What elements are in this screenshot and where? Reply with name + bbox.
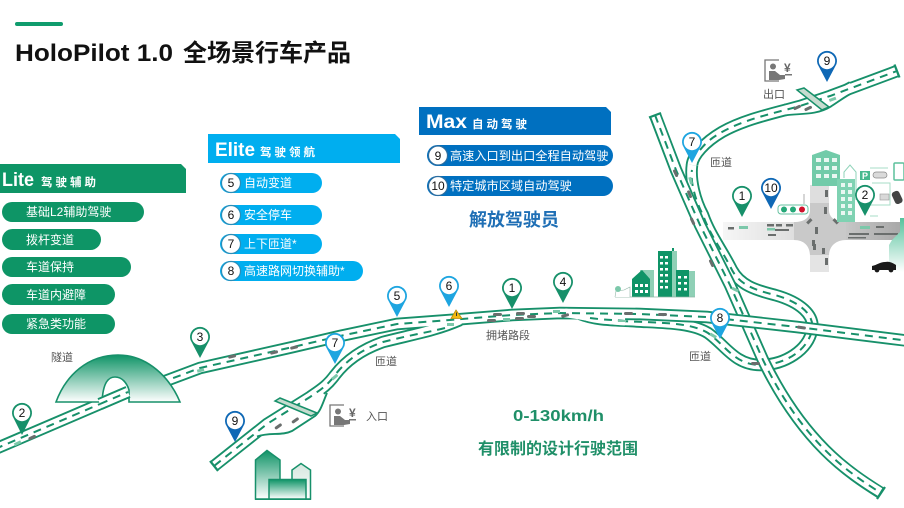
toll gate: entrance <box>275 398 317 416</box>
Max feature 10 <box>427 176 613 196</box>
pin 10 blue city: 10 <box>764 181 778 195</box>
Max slogan: 解放驾驶员 <box>469 210 559 230</box>
warning sign <box>451 310 462 318</box>
label: exit: 出口 <box>763 87 785 101</box>
Elite feature 6: 6 <box>228 208 235 222</box>
toll gate: exit <box>797 88 829 110</box>
city: mid skyline <box>615 248 695 297</box>
Max feature 9 <box>427 145 613 166</box>
toll icon: exit: ¥ <box>784 61 791 75</box>
pin 9 blue lower <box>225 411 245 442</box>
Lite header: 驾驶辅助 <box>41 175 99 189</box>
panel: Lite <box>0 164 186 334</box>
Elite feature 8: 高速路网切换辅助* <box>244 263 345 278</box>
Max feature 10: 特定城市区域自动驾驶 <box>450 178 572 193</box>
Max feature 9: 9 <box>435 149 442 163</box>
panel: Max <box>419 107 613 230</box>
traffic light <box>778 194 808 214</box>
label: ramp top: 匝道 <box>710 155 732 169</box>
pin 7 cyan lower <box>325 333 345 364</box>
Lite header: Lite <box>2 170 34 191</box>
pin 9 blue lower: 9 <box>232 414 239 428</box>
black car <box>872 262 896 272</box>
Elite feature 7: 7 <box>228 237 235 251</box>
pin 7 cyan top <box>682 132 702 163</box>
pin 2 green city: 2 <box>862 188 869 202</box>
Elite feature 8 <box>220 261 363 281</box>
Elite feature 6 <box>220 205 322 225</box>
title: 全场景行车产品 <box>183 40 351 67</box>
Elite feature 5: 5 <box>228 176 235 190</box>
Lite header <box>0 164 186 193</box>
pin 2 green city <box>855 185 875 216</box>
Elite feature 5 <box>220 173 322 193</box>
Lite feature: L2: 基础L2辅助驾驶 <box>26 204 111 219</box>
label: entrance: 入口 <box>366 411 388 423</box>
Elite header <box>208 134 400 163</box>
Max feature 10: 10 <box>431 179 445 193</box>
toll icon: entrance: ¥ <box>349 406 356 420</box>
pin 1 green mid: 1 <box>509 281 516 295</box>
pin 8 cyan: 8 <box>717 311 724 325</box>
pin 2 green <box>12 403 32 435</box>
Elite feature 7: 上下匝道* <box>244 237 297 251</box>
Elite feature 7 <box>220 234 322 254</box>
road: north-south expressway <box>649 113 885 499</box>
Elite header: 驾驶领航 <box>260 145 318 159</box>
pin 10 blue city <box>761 178 781 209</box>
pin 7 cyan lower: 7 <box>332 336 339 350</box>
pin 4 green: 4 <box>560 275 567 289</box>
cars on roads <box>14 97 836 446</box>
pin 1 green mid <box>502 278 522 309</box>
city: parking area <box>860 163 904 216</box>
Elite header: Elite <box>215 140 255 161</box>
pin 9 blue top <box>817 51 837 82</box>
Lite feature: avoidance: 车道内避障 <box>26 287 86 302</box>
pin 1 green city: 1 <box>739 189 746 203</box>
toll icon: exit <box>765 60 792 81</box>
pin 6 cyan <box>439 276 459 307</box>
pin 5 cyan: 5 <box>394 289 401 303</box>
city: intersection <box>723 185 901 272</box>
Lite feature: lane change <box>2 229 101 250</box>
title: HoloPilot 1.0 <box>15 40 173 67</box>
Max header: 自动驾驶 <box>472 117 530 131</box>
speed range: 0-130km/h <box>513 408 604 425</box>
Elite feature 8: 8 <box>228 264 235 278</box>
Max header: Max <box>426 112 467 133</box>
Lite feature: L2 <box>2 202 144 222</box>
pin 6 cyan: 6 <box>446 279 453 293</box>
Lite feature: lane keep <box>2 257 131 277</box>
pin 3 green <box>190 327 210 358</box>
Max header <box>419 107 611 135</box>
title <box>15 40 351 67</box>
toll icon: entrance <box>330 405 356 426</box>
road: main expressway with lower entrance ramp <box>160 313 904 471</box>
pin 5 cyan <box>387 286 407 317</box>
pin 2 green: 2 <box>19 406 26 420</box>
pin 8 cyan <box>710 308 730 339</box>
accent bar <box>15 22 63 26</box>
Lite feature: avoidance <box>2 284 115 305</box>
pin 4 green <box>553 272 573 303</box>
pin 1 green city <box>732 186 752 217</box>
pin 7 cyan top: 7 <box>689 135 696 149</box>
label: ramp left: 匝道 <box>375 354 397 368</box>
design domain caption: 有限制的设计行驶范围 <box>478 440 638 458</box>
pin 9 blue top: 9 <box>824 54 831 68</box>
label: ramp right: 匝道 <box>689 349 711 363</box>
label: congestion: 拥堵路段 <box>486 328 530 342</box>
tunnel <box>56 355 180 404</box>
panel: Elite <box>208 134 400 281</box>
label: tunnel: 隧道 <box>51 350 73 364</box>
Lite feature: emergency <box>2 314 115 334</box>
Lite feature: emergency: 紧急类功能 <box>26 316 86 331</box>
lower factory buildings <box>255 450 311 499</box>
city: buildings <box>812 150 904 272</box>
pin 3 green: 3 <box>197 330 204 344</box>
Max feature 9: 高速入口到出口全程自动驾驶 <box>450 148 608 163</box>
Elite feature 6: 安全停车 <box>244 207 292 222</box>
city: parking area: P <box>862 171 868 181</box>
road: cloverleaf loop and upper exit ramp <box>580 64 900 365</box>
road: left section into tunnel <box>0 392 128 449</box>
Lite feature: lane change: 拨杆变道 <box>26 232 74 247</box>
Lite feature: lane keep: 车道保持 <box>26 259 74 274</box>
Elite feature 5: 自动变道 <box>244 175 292 190</box>
